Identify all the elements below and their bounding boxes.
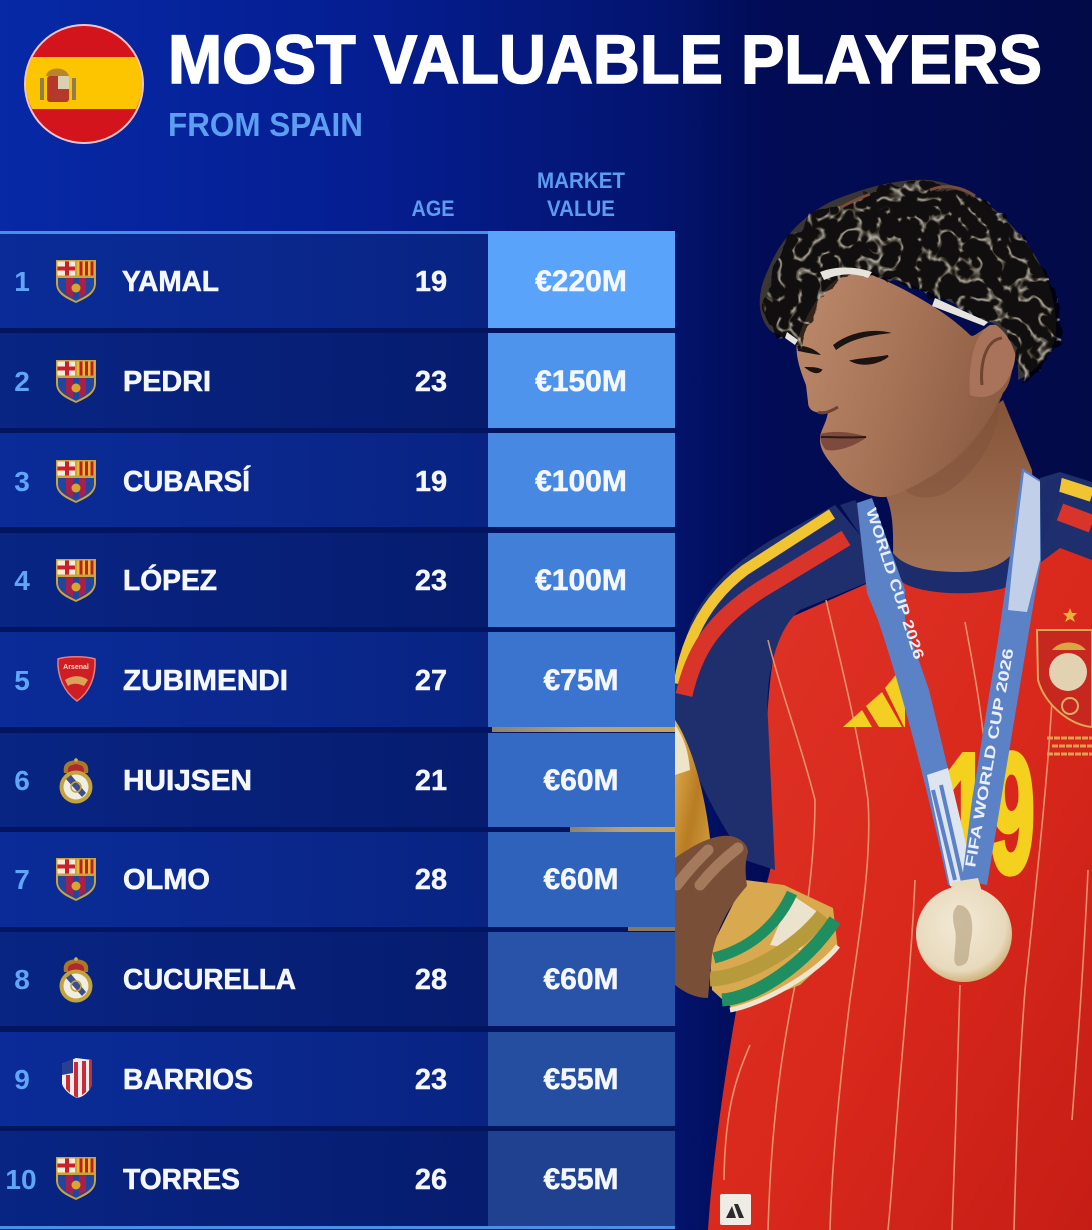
row 3: Cubarsí — [0, 433, 675, 527]
row 10: Torres: 10 — [5, 1164, 37, 1195]
row 4: López: 4 — [14, 565, 30, 596]
row 8: Cucurella: 28 — [415, 964, 447, 996]
jersey tag — [720, 1194, 751, 1225]
table bottom rule — [0, 1226, 675, 1229]
row 9: Barrios: 23 — [415, 1064, 447, 1096]
eyes — [807, 356, 888, 372]
headband — [785, 268, 988, 345]
row 4: López: LÓPEZ — [123, 563, 217, 597]
flag of Spain — [24, 24, 144, 144]
badge: Barcelona — [56, 1157, 96, 1200]
row 5: Zubimendi: ZUBIMENDI — [123, 665, 288, 697]
row 3: Cubarsí: 3 — [14, 466, 30, 497]
row 5: Zubimendi: €75M — [543, 664, 619, 697]
torso: red jersey — [708, 545, 1092, 1230]
row 5: Zubimendi: 27 — [415, 665, 447, 697]
badge: Barcelona — [56, 460, 96, 503]
trophy slivers showing through row gaps — [492, 727, 675, 931]
hand holding trophy — [675, 836, 748, 998]
row 8: Cucurella: 8 — [14, 964, 30, 995]
medal lanyard: FIFA WORLD CUP 2026 — [962, 647, 1017, 869]
badge: Barcelona — [56, 559, 96, 602]
gold medal — [916, 878, 1012, 982]
column header: market value: VALUE — [547, 196, 615, 221]
row 2: Pedri — [0, 333, 675, 428]
row 1: Yamal: 19 — [415, 266, 447, 298]
row 3: Cubarsí: CUBARSÍ — [123, 464, 251, 498]
badge: Barcelona — [56, 858, 96, 901]
row 6: Huijsen — [0, 733, 675, 827]
hair — [760, 180, 1056, 380]
column header: market value: MARKET — [537, 168, 626, 193]
row 2: Pedri: €150M — [535, 365, 627, 398]
row 5: Zubimendi: 5 — [14, 665, 30, 696]
row 10: Torres: 26 — [415, 1164, 447, 1196]
row 6: Huijsen: 21 — [415, 765, 447, 797]
row 7: Olmo: €60M — [543, 863, 619, 896]
head — [797, 270, 1015, 498]
world cup trophy — [675, 720, 838, 1010]
federation crest — [1037, 608, 1092, 754]
medal lanyard: WORLD CUP 2026 — [862, 506, 927, 662]
right shoulder — [1020, 472, 1092, 578]
table backing — [0, 234, 675, 1226]
badge: Arsenal — [58, 657, 95, 701]
row 9: Barrios: BARRIOS — [123, 1064, 253, 1096]
table top rule — [0, 231, 675, 234]
row 9: Barrios: 9 — [14, 1064, 30, 1095]
mouth — [820, 432, 867, 450]
badge: Atletico Madrid — [62, 1058, 92, 1098]
badge: Barcelona — [56, 360, 96, 403]
row 1: Yamal: 1 — [14, 266, 30, 297]
row 2: Pedri: 23 — [415, 366, 447, 398]
title: MOST VALUABLE PLAYERS — [168, 21, 1042, 98]
medal lanyard — [857, 468, 1041, 886]
row 10: Torres: TORRES — [123, 1164, 240, 1196]
nose shading — [818, 407, 838, 413]
ear — [970, 325, 1015, 397]
cheek shading — [905, 395, 1000, 498]
row 4: López: 23 — [415, 565, 447, 597]
shirt pinstripes — [724, 600, 1088, 1230]
row 10: Torres: €55M — [543, 1163, 619, 1196]
player illustration — [675, 180, 1092, 1230]
row 7: Olmo: 28 — [415, 864, 447, 896]
row 6: Huijsen: HUIJSEN — [123, 765, 252, 797]
adidas logo — [843, 672, 905, 727]
badge: Real Madrid — [60, 957, 92, 1002]
row 8: Cucurella: €60M — [543, 963, 619, 996]
row 6: Huijsen: €60M — [543, 764, 619, 797]
row 4: López: €100M — [535, 564, 627, 597]
row 3: Cubarsí: 19 — [415, 466, 447, 498]
row 7: Olmo: 7 — [14, 864, 30, 895]
row 2: Pedri: PEDRI — [123, 366, 211, 398]
hair reddish tips — [840, 187, 975, 208]
row 10: Torres — [0, 1131, 675, 1226]
flag coat of arms — [40, 68, 76, 102]
badge: Arsenal: Arsenal — [63, 664, 89, 671]
row 7: Olmo: OLMO — [123, 864, 210, 896]
badge: Barcelona — [56, 260, 96, 303]
row 8: Cucurella: CUCURELLA — [123, 964, 296, 996]
row 9: Barrios — [0, 1032, 675, 1126]
left sleeve — [675, 505, 893, 870]
row 5: Zubimendi — [0, 632, 675, 727]
row 3: Cubarsí: €100M — [535, 465, 627, 498]
row 9: Barrios: €55M — [543, 1063, 619, 1096]
column header: age: AGE — [412, 196, 454, 221]
subtitle: FROM SPAIN — [168, 106, 363, 143]
neck — [883, 400, 1033, 582]
row 7: Olmo — [0, 832, 675, 927]
row 1: Yamal: YAMAL — [122, 266, 219, 298]
row 8: Cucurella — [0, 932, 675, 1026]
row 6: Huijsen: 6 — [14, 765, 30, 796]
eyebrows — [797, 331, 892, 355]
row 4: López — [0, 533, 675, 627]
collar — [840, 476, 1062, 593]
column header: market value — [537, 168, 626, 221]
row 1: Yamal: €220M — [535, 265, 627, 298]
row 2: Pedri: 2 — [14, 366, 30, 397]
row 1: Yamal — [0, 231, 675, 328]
badge: Real Madrid — [60, 758, 92, 804]
